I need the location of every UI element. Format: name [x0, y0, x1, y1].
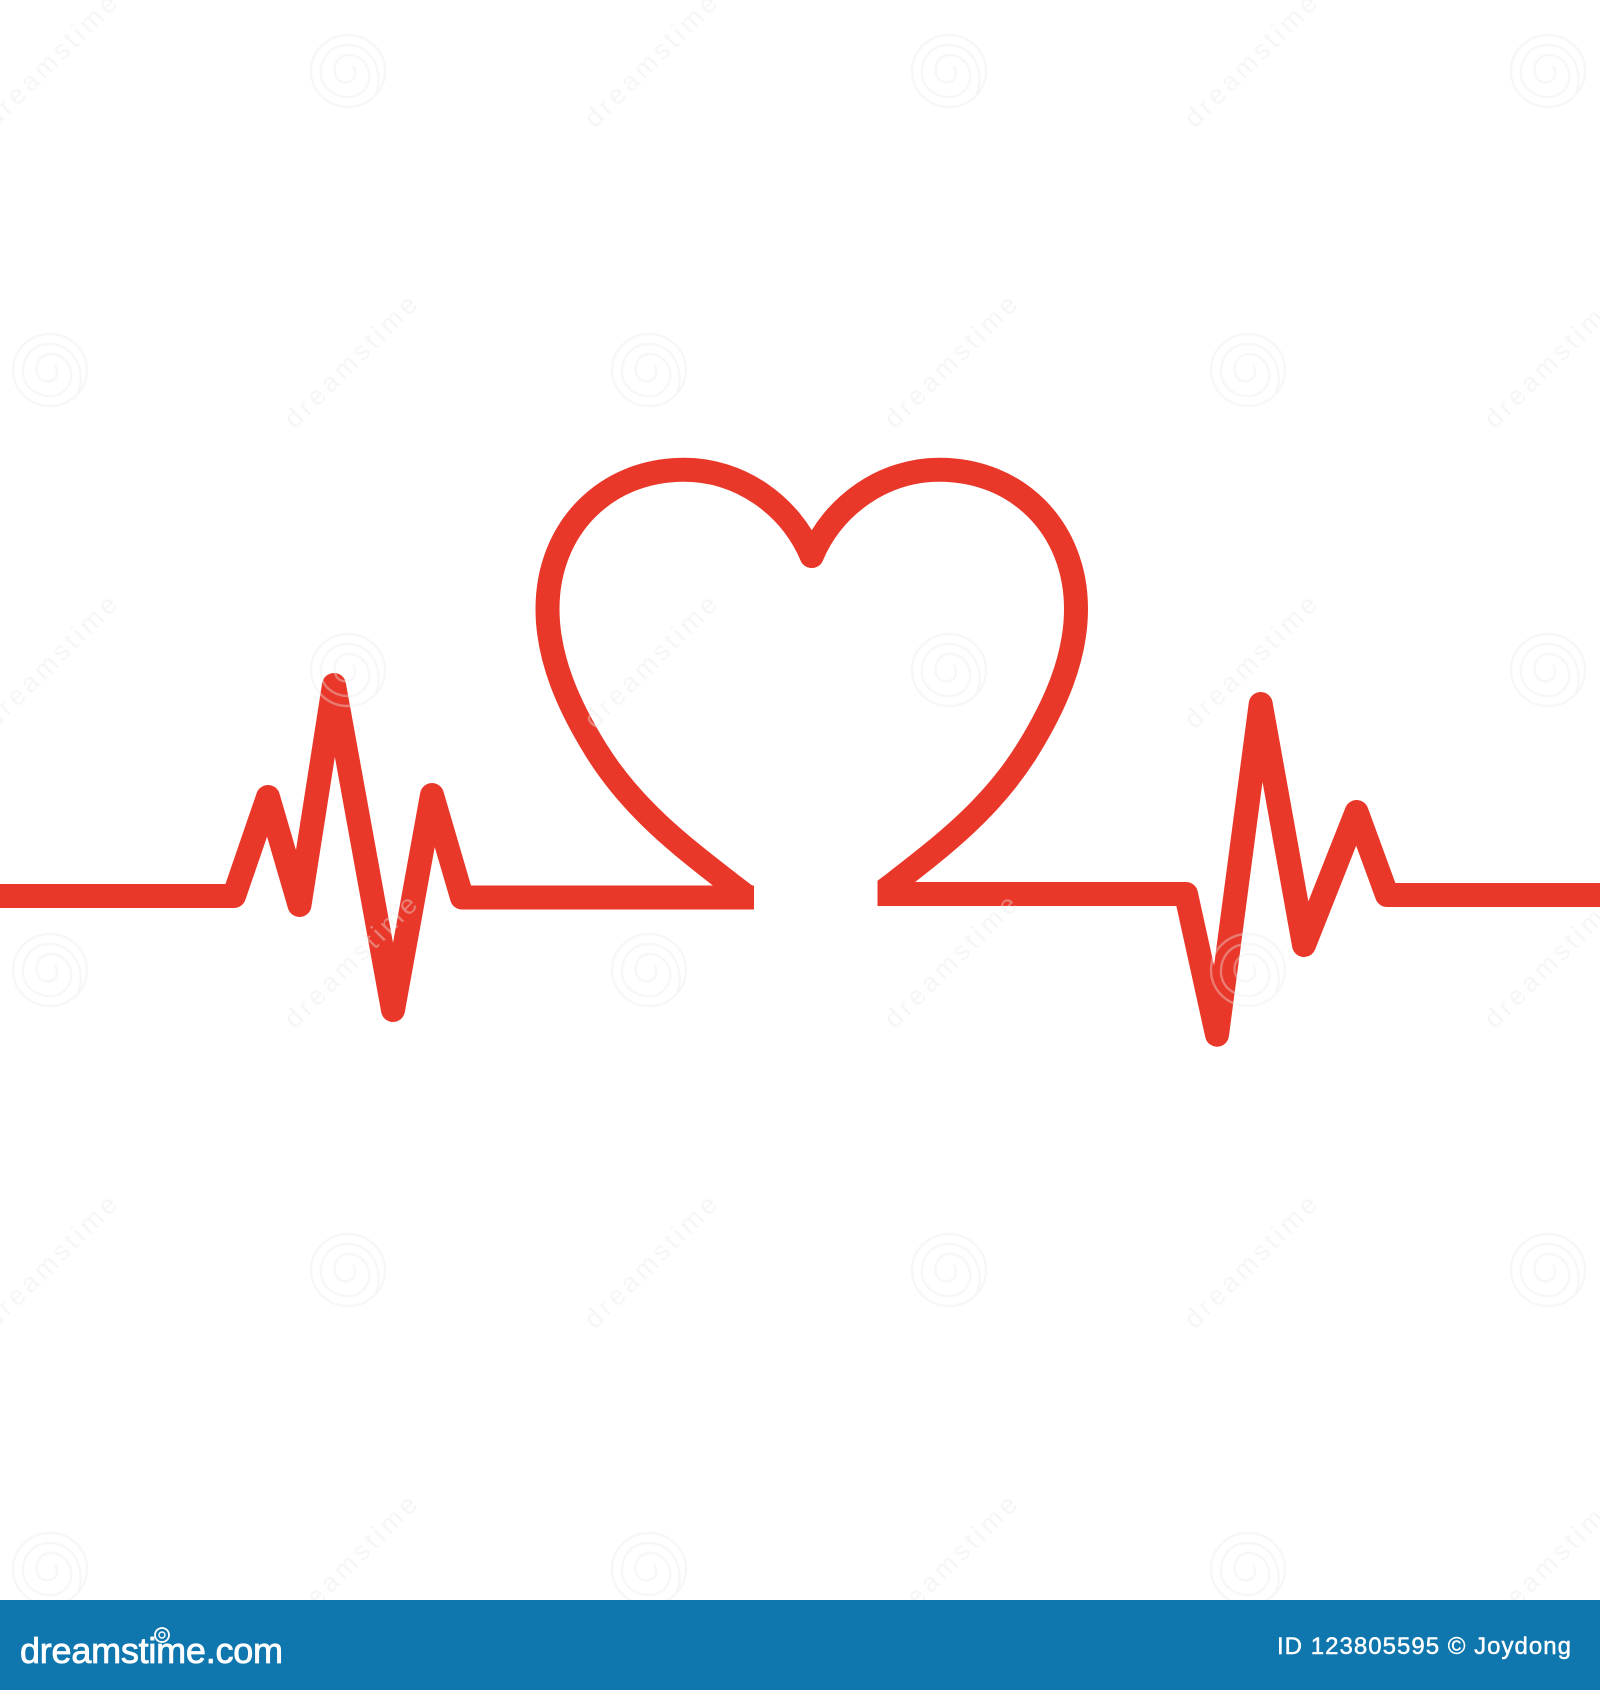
- watermark: diagonal dreamstime text: dreamstime: [878, 889, 1023, 1034]
- footer logo: dreamstime.com: dreamstime.com: [20, 1630, 283, 1671]
- heart outline: [548, 470, 1076, 918]
- watermark: diagonal dreamstime text: dreamstime: [1178, 589, 1323, 734]
- watermark: diagonal dreamstime text: dreamstime: [578, 589, 723, 734]
- watermark: diagonal dreamstime text: dreamstime: [1178, 1189, 1323, 1334]
- watermark: diagonal dreamstime text: dreamstime: [578, 1189, 723, 1334]
- heartbeat line: right pulse: [870, 704, 1600, 1035]
- watermark: diagonal dreamstime text: dreamstime: [878, 1489, 1023, 1634]
- watermark: diagonal dreamstime text: dreamstime: [278, 1489, 423, 1634]
- watermark: diagonal dreamstime text: dreamstime: [278, 889, 423, 1034]
- footer credit: image ID and author: ID 123805595 © Joydong: [1277, 1633, 1571, 1660]
- heartbeat line: left pulse: [0, 685, 754, 1010]
- footer bar: [0, 1600, 1600, 1690]
- watermark: diagonal dreamstime text: dreamstime: [878, 289, 1023, 434]
- watermark: diagonal dreamstime text: dreamstime: [278, 289, 423, 434]
